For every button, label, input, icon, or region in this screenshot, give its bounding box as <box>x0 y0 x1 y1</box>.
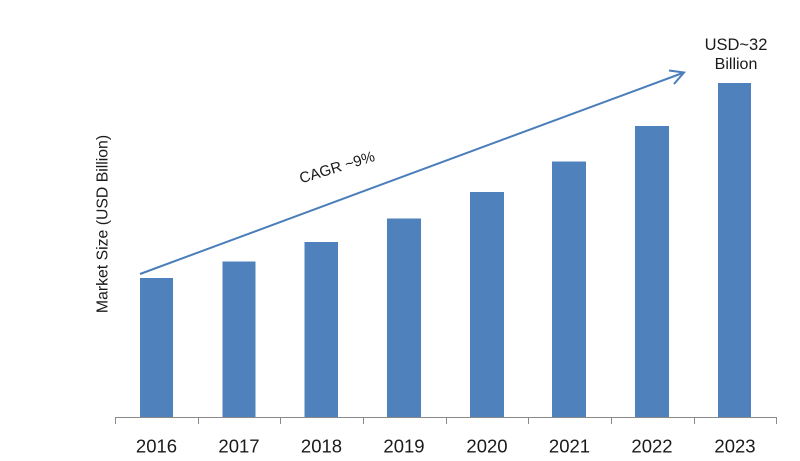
year labels: 2022 <box>631 436 673 456</box>
year labels: 2017 <box>218 436 260 456</box>
bars <box>140 83 751 417</box>
year labels: 2016 <box>136 436 177 456</box>
x axis with ticks <box>115 417 776 424</box>
year labels: 2020 <box>466 436 508 456</box>
end value callout: USD~32 <box>705 36 767 54</box>
year labels <box>136 436 756 456</box>
year labels: 2018 <box>301 436 342 456</box>
year labels: 2021 <box>549 436 590 456</box>
end value callout <box>705 36 767 73</box>
year labels: 2023 <box>714 436 756 456</box>
CAGR label: CAGR ~9% <box>297 148 377 187</box>
end value callout: Billion <box>715 56 757 73</box>
year labels: 2019 <box>383 436 425 456</box>
y-axis title: Market Size (USD Billion) <box>94 135 112 313</box>
CAGR growth arrow <box>140 70 684 274</box>
